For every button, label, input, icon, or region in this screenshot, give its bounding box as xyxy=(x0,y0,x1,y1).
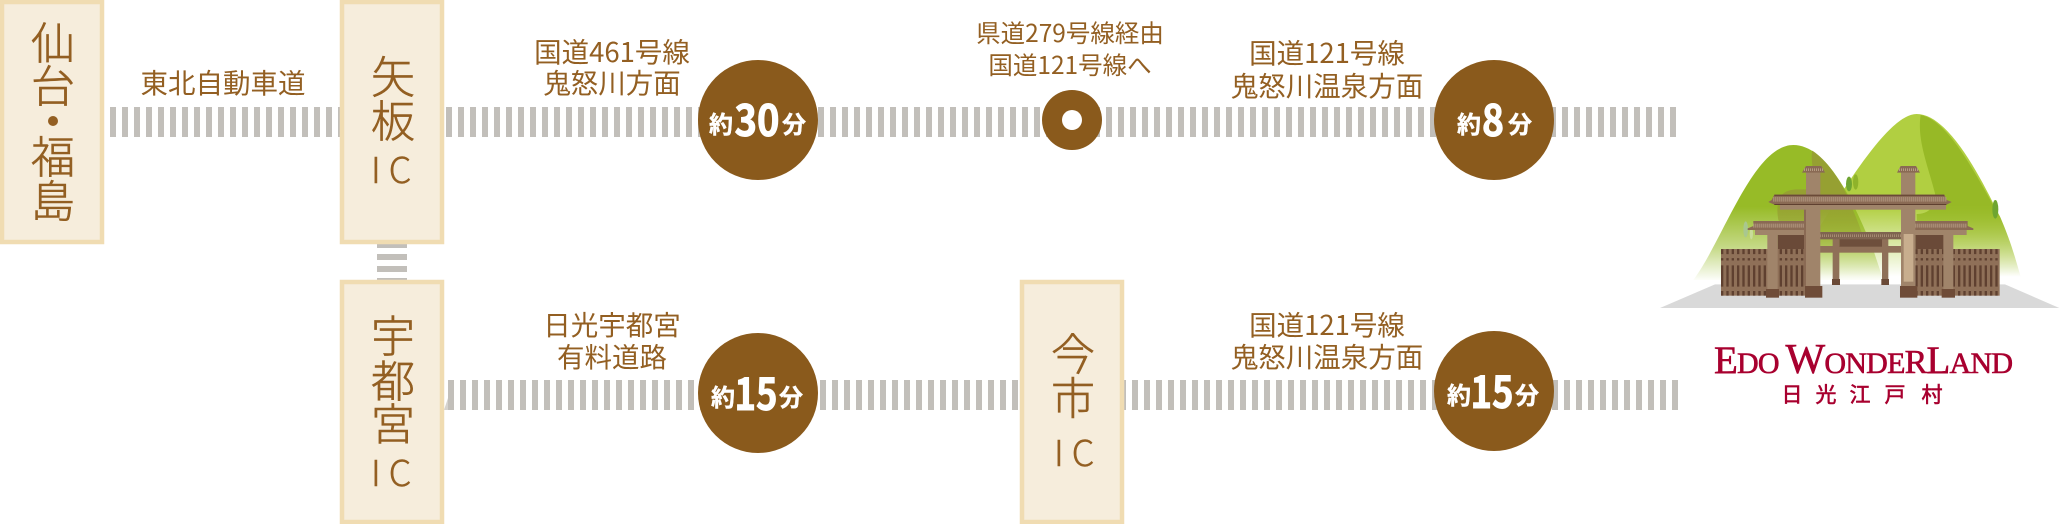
label: Route 121 upper: 国道121号線 xyxy=(1249,31,1405,71)
track: lower route start notch xyxy=(444,398,448,410)
track: upper route xyxy=(446,107,1676,137)
label: Route 121 lower: 鬼怒川温泉方面 xyxy=(1231,335,1423,375)
box: Imaichi IC: 今 xyxy=(1051,319,1095,383)
waypoint marker xyxy=(1042,90,1102,150)
badge: about 15 minutes left xyxy=(698,333,818,453)
mountain: left xyxy=(1693,145,1883,280)
badge: about 8 minutes xyxy=(1434,60,1554,180)
badge: about 15 minutes right xyxy=(1434,331,1554,451)
box: Yaita IC: 板 xyxy=(371,86,415,150)
label: Route 121 upper xyxy=(1231,31,1423,104)
box: Sendai Fukushima: 島 xyxy=(31,166,75,230)
label: Prefectural road 279 xyxy=(976,15,1164,82)
fence xyxy=(1721,249,2000,296)
badge: about 15 minutes left: 15 xyxy=(734,359,778,423)
box: Sendai Fukushima: 仙 xyxy=(31,8,75,72)
label: Prefectural road 279: 県道279号線経由 xyxy=(976,15,1164,50)
badge: about 30 minutes: 30 xyxy=(734,87,780,149)
badge: about 15 minutes left: 約 xyxy=(711,378,735,413)
label: Route 121 lower xyxy=(1231,303,1423,375)
label: Route 121 upper: 鬼怒川温泉方面 xyxy=(1231,64,1423,104)
illustration: mountains and gate xyxy=(1660,114,2059,308)
box: Imaichi IC: 市 xyxy=(1051,363,1095,427)
label: Route 121 lower: 国道121号線 xyxy=(1249,303,1405,343)
label: Prefectural road 279: 国道121号線へ xyxy=(988,47,1152,82)
badge: about 30 minutes xyxy=(698,60,818,180)
main pillars xyxy=(1802,166,1920,298)
box: Sendai Fukushima: 福 xyxy=(31,122,75,186)
badge: about 15 minutes right: 分 xyxy=(1515,376,1539,411)
label: Nikko Utsunomiya toll road: 有料道路 xyxy=(557,335,667,375)
box: Utsunomiya IC: IC xyxy=(371,445,419,497)
box: Utsunomiya IC: 都 xyxy=(371,346,415,410)
side wings xyxy=(1748,221,1973,298)
badge: about 8 minutes: 8 xyxy=(1482,87,1504,149)
label: Nikko Utsunomiya toll road xyxy=(543,303,681,375)
badge: about 15 minutes right: 15 xyxy=(1470,357,1514,421)
badge: about 8 minutes: 分 xyxy=(1508,105,1532,140)
logo: Edo Wonderland wordmark: 日光江戸村 xyxy=(1782,379,1942,409)
badge: about 30 minutes: 約 xyxy=(709,105,733,140)
badge: about 15 minutes right: 約 xyxy=(1447,376,1471,411)
mountain: right xyxy=(1783,114,2021,280)
box: Utsunomiya IC: 宇 xyxy=(371,301,415,365)
label: Route 461: 鬼怒川方面 xyxy=(543,61,681,101)
label: Tohoku Expressway: 東北自動車道 xyxy=(140,61,306,101)
box: Utsunomiya IC xyxy=(342,282,442,522)
logo: Edo Wonderland wordmark: EDO WONDERLAND xyxy=(1714,337,2013,383)
track: Sendai to Yaita xyxy=(110,107,340,137)
label: Route 461: 国道461号線 xyxy=(534,30,690,70)
box: Yaita IC xyxy=(342,2,442,242)
track: lower route xyxy=(448,380,1678,410)
inner gate xyxy=(1820,232,1902,285)
box: Sendai Fukushima: 台 xyxy=(31,51,75,115)
box: Imaichi IC xyxy=(1022,282,1122,522)
label: Route 461 xyxy=(534,30,690,101)
badge: about 30 minutes: 分 xyxy=(782,105,806,140)
logo: Edo Wonderland wordmark xyxy=(1714,337,2013,409)
track: Yaita to Utsunomiya connector xyxy=(377,242,407,280)
label: Nikko Utsunomiya toll road: 日光宇都宮 xyxy=(543,303,681,343)
box: Imaichi IC: IC xyxy=(1054,425,1102,477)
trees xyxy=(1743,174,1998,239)
badge: about 8 minutes: 約 xyxy=(1457,105,1481,140)
box: Utsunomiya IC: 宮 xyxy=(371,389,415,453)
box: Yaita IC: 矢 xyxy=(371,42,415,106)
ground xyxy=(1660,284,2059,308)
box: Yaita IC: IC xyxy=(371,142,419,194)
top roof xyxy=(1768,195,1952,210)
badge: about 15 minutes left: 分 xyxy=(779,378,803,413)
box: Sendai Fukushima xyxy=(2,2,102,242)
